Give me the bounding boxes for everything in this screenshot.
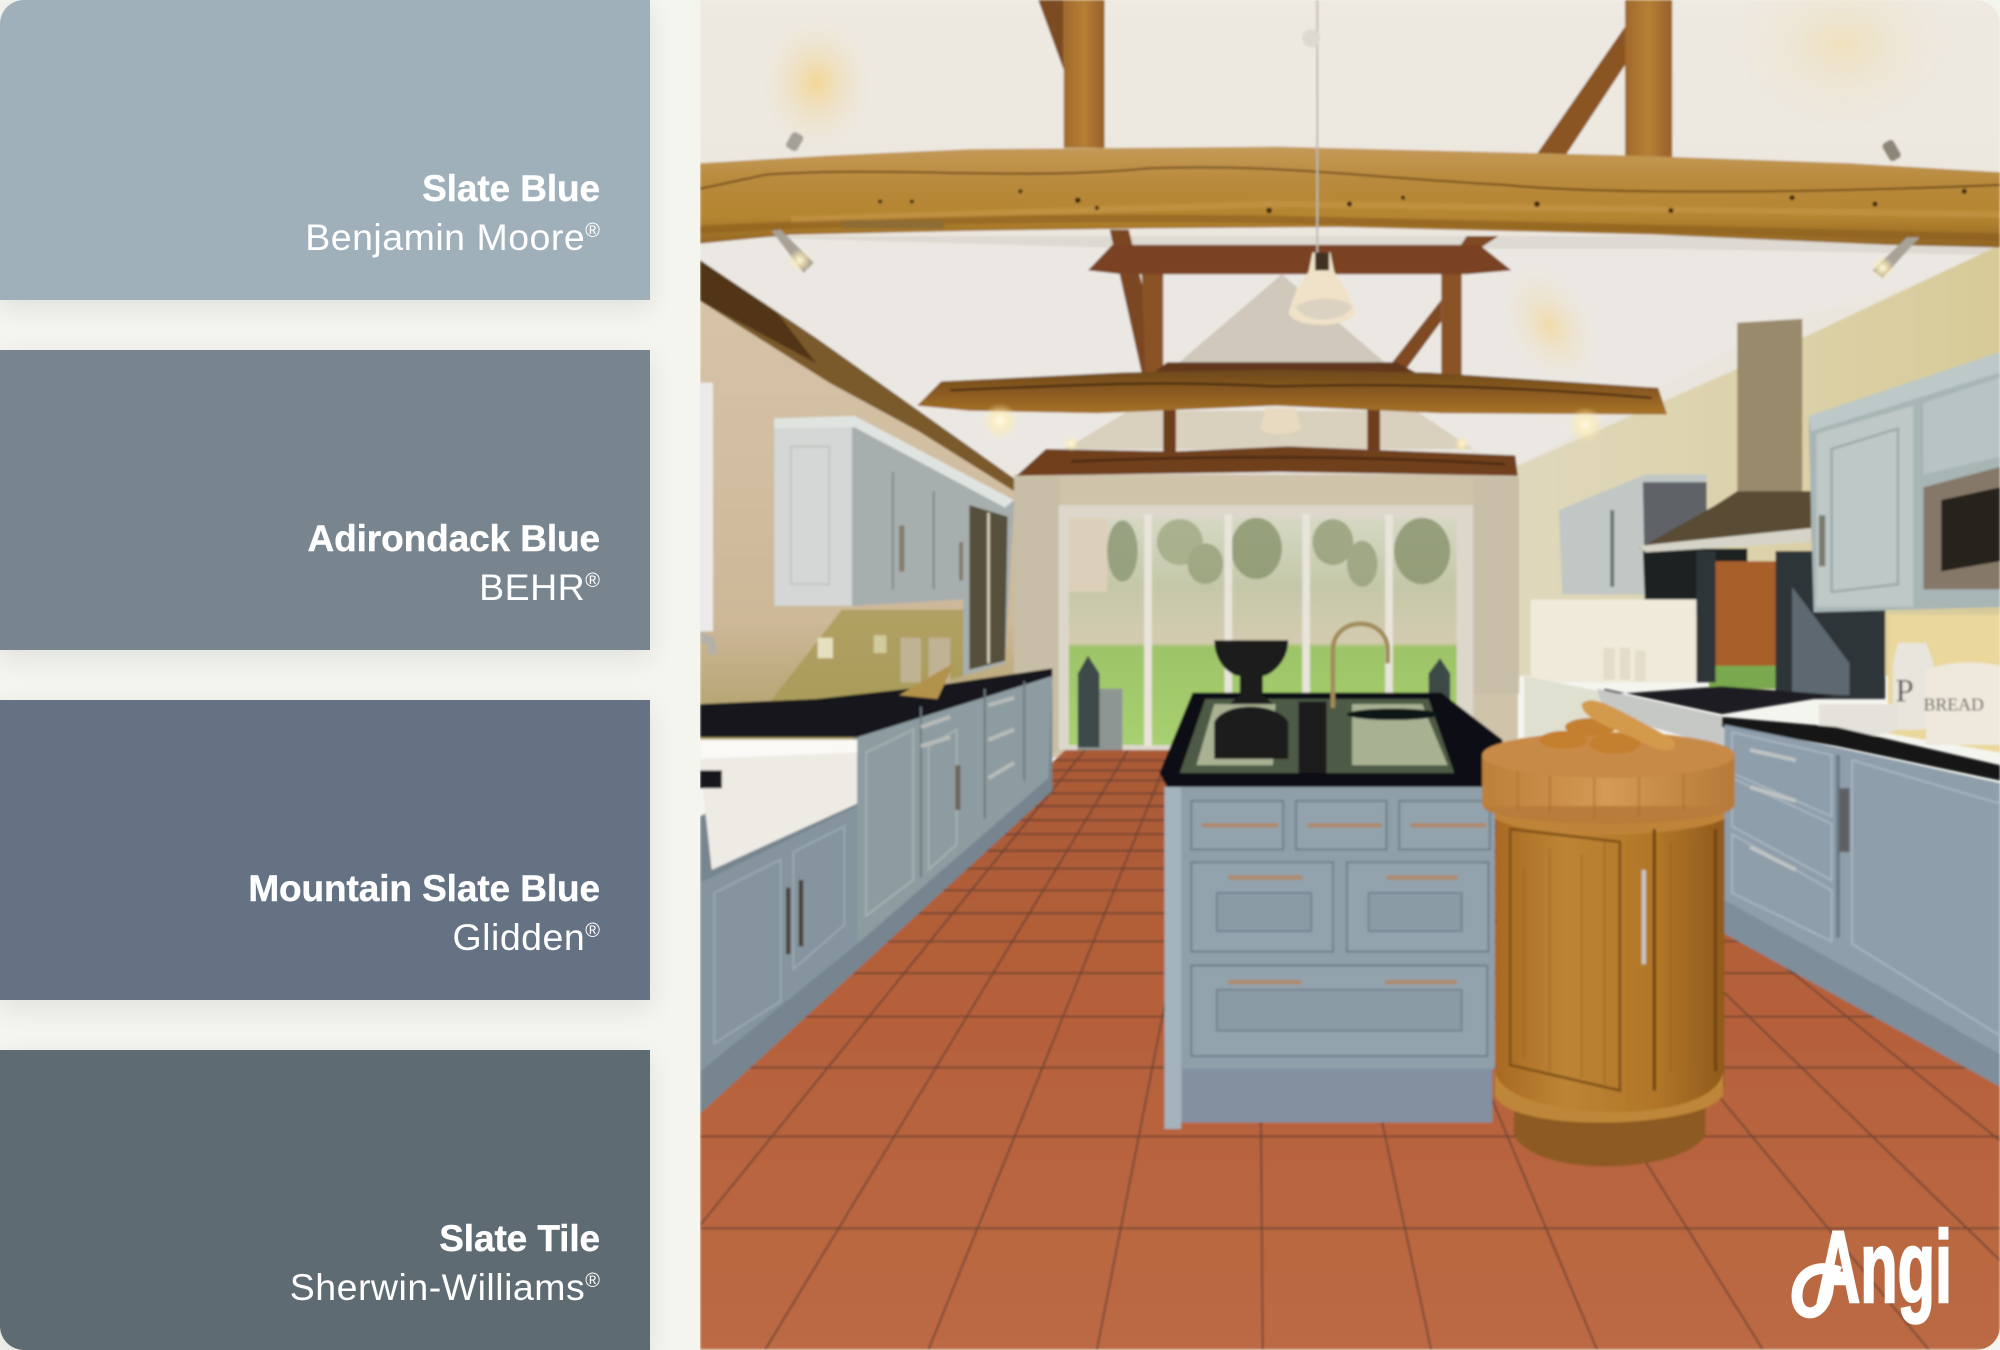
panel: Slate Blue swatch	[0, 0, 650, 300]
swatch name: Mountain Slate Blue: Mountain Slate Blue	[248, 868, 600, 909]
swatch name: Adirondack Blue: Adirondack Blue	[308, 518, 600, 559]
pendant lights	[1260, 0, 1356, 434]
vertical posts and braces	[1038, 0, 1672, 452]
floor with terracotta tiles	[700, 748, 2000, 1350]
photo: kitchen with oak beams and slate blue cabinets	[700, 0, 2000, 1350]
fruit bowl	[1214, 640, 1288, 704]
kitchen island	[1159, 624, 1503, 1129]
oak butcher block cabinet	[1482, 700, 1735, 1166]
panel: Adirondack Blue swatch	[0, 350, 650, 650]
brand: Sherwin-Williams: Sherwin-Williams®	[290, 1266, 600, 1308]
brand: Benjamin Moore: Benjamin Moore®	[305, 216, 600, 258]
ceiling	[700, 0, 2000, 510]
oak beams	[700, 0, 2000, 491]
window and garden view	[1059, 505, 1473, 753]
panel: Slate Tile swatch	[0, 1050, 650, 1350]
brand: BEHR: BEHR®	[479, 566, 600, 608]
swatch name: Slate Blue: Slate Blue	[422, 168, 600, 209]
swatch name: Slate Tile: Slate Tile	[439, 1218, 600, 1259]
walls	[700, 245, 2000, 759]
jars and bread canister	[1819, 643, 2000, 745]
middle beam	[917, 370, 1667, 415]
island countertop	[1159, 693, 1503, 787]
jars and bread canister: P	[1895, 673, 1914, 710]
right upper cabinets and microwave	[1809, 352, 2000, 753]
back truss beam	[1088, 245, 1511, 274]
left lower cabinets, sink and counter	[700, 663, 1052, 1114]
spot lights	[772, 131, 1920, 452]
far beam	[1017, 446, 1518, 476]
diagonal wall beam	[700, 260, 1014, 491]
panel: Mountain Slate Blue swatch	[0, 700, 650, 1000]
gooseneck faucet	[1333, 624, 1388, 708]
main beam	[700, 147, 2000, 247]
left upper cabinets	[700, 416, 1014, 708]
Angi logo: Angi	[1816, 1210, 1952, 1324]
right lower cabinets	[1722, 717, 2000, 1087]
island cabinet body	[1165, 787, 1495, 1129]
brand: Glidden: Glidden®	[452, 916, 600, 958]
bread loaves	[1540, 700, 1675, 754]
jars and bread canister: BREAD	[1923, 694, 1984, 714]
right back cabinets, hood and range	[1524, 319, 1885, 747]
